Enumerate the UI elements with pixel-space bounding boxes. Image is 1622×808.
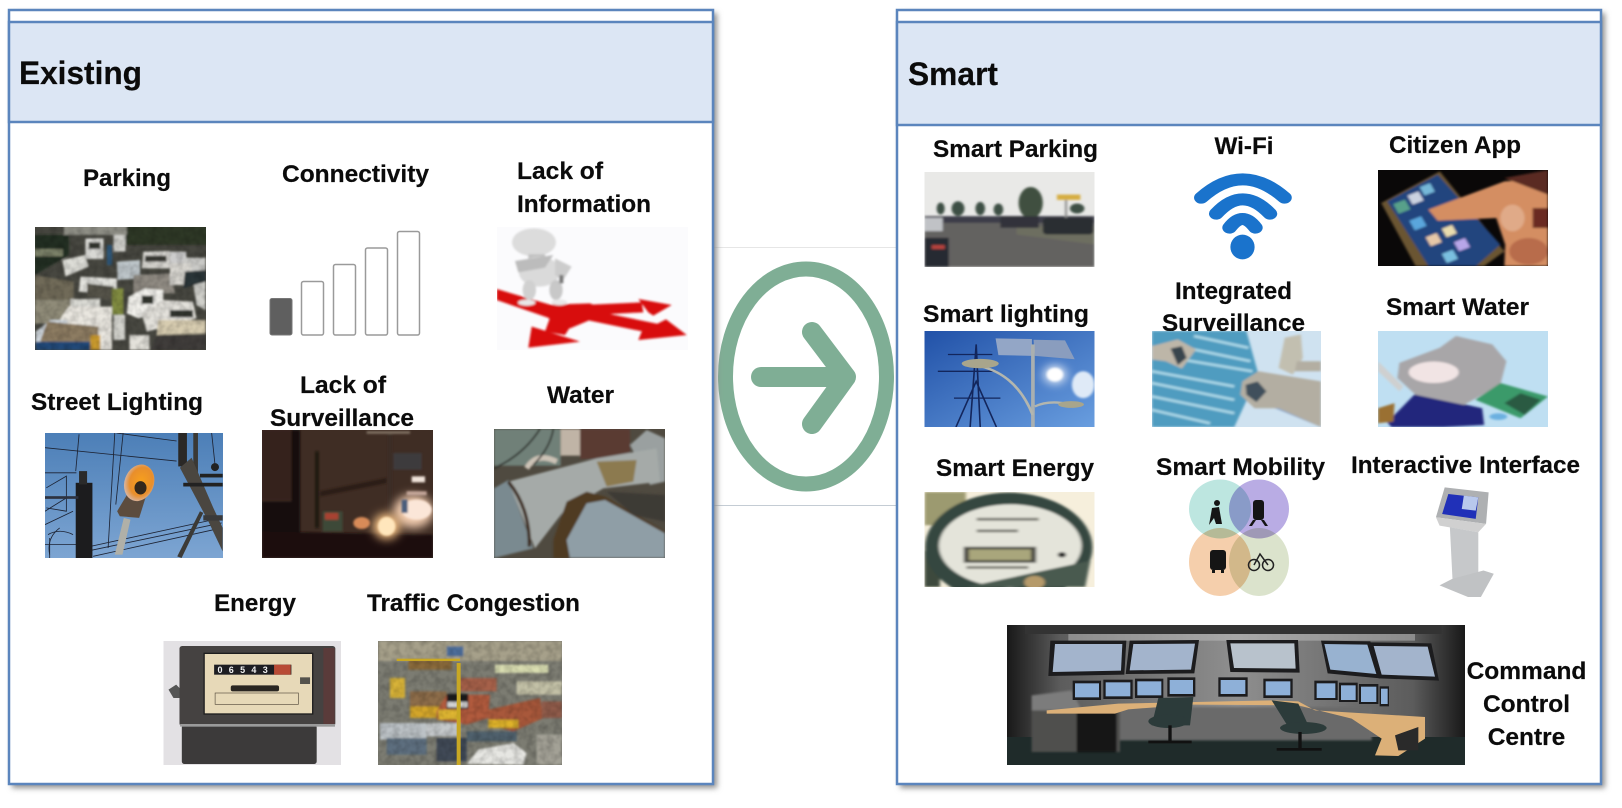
label: Command Control Centre [1467, 658, 1586, 751]
photo: street lamp and wires [45, 433, 223, 558]
panel: existing [9, 10, 717, 788]
connector line: top [713, 246, 896, 248]
photo: smart water meter [1378, 331, 1548, 427]
label: Integrated Surveillance: Integrated [1175, 278, 1292, 305]
icon: bus [1210, 550, 1226, 573]
heading: Smart: Smart [908, 56, 998, 92]
photo: analog energy meter [164, 641, 341, 765]
label: Smart Water: Smart Water [1386, 294, 1529, 321]
arrow: transition from existing to smart [726, 269, 886, 484]
photo: surveillance cameras on glass tower [1152, 331, 1321, 427]
label: Command Control Centre: Centre [1488, 724, 1565, 751]
icon: signal strength bars [270, 232, 420, 335]
label: Smart Energy: Smart Energy [936, 455, 1094, 482]
photo: smart parking lot [924, 172, 1094, 267]
icon: information kiosk [1436, 487, 1494, 597]
icon: bicycle [1248, 554, 1274, 570]
label: Street Lighting: Street Lighting [31, 389, 203, 416]
label: Lack of Information: Information [517, 191, 651, 218]
photo: digital smart meter [924, 492, 1094, 587]
label: Lack of Surveillance: Lack of [300, 372, 387, 399]
label: Smart Parking: Smart Parking [933, 136, 1098, 163]
label: Lack of Information: Lack of [517, 158, 604, 185]
label: Interactive Interface: Interactive Interface [1351, 452, 1580, 479]
label: Energy: Energy [214, 590, 296, 617]
label: Smart Mobility: Smart Mobility [1156, 454, 1325, 481]
label: Citizen App: Citizen App [1389, 132, 1521, 159]
photo: command control centre [1007, 625, 1465, 765]
header band: smart [897, 22, 1601, 125]
photo: dark street at night [262, 430, 433, 558]
label: Lack of Surveillance [270, 372, 414, 432]
photo: finger tapping smartphone [1378, 170, 1548, 266]
icon: wifi signal [1194, 173, 1292, 260]
label: Lack of Information [517, 158, 651, 218]
heading: Existing: Existing [19, 55, 142, 91]
icon: walker [1209, 500, 1222, 525]
photo: leaking rusty pipes [494, 429, 665, 558]
label: Command Control Centre: Command [1467, 658, 1586, 685]
label: Water: Water [547, 382, 614, 409]
label: Lack of Surveillance: Surveillance [270, 405, 414, 432]
label: Command Control Centre: Control [1483, 691, 1570, 718]
photo: traffic congestion [378, 641, 562, 765]
label: Smart lighting: Smart lighting [923, 301, 1089, 328]
photo: solar street light [924, 331, 1094, 427]
label: Wi-Fi: Wi-Fi [1214, 133, 1274, 160]
photo: thinking figure at red crossroads [497, 227, 688, 350]
label: Integrated Surveillance: Surveillance [1162, 310, 1305, 337]
label: Traffic Congestion: Traffic Congestion [367, 590, 580, 617]
panel: smart [897, 10, 1605, 788]
label: Connectivity: Connectivity [282, 161, 429, 188]
header band: existing [9, 22, 713, 122]
photo: analog energy meter: 06543 [217, 665, 274, 675]
label: Integrated Surveillance [1162, 278, 1305, 337]
label: Parking: Parking [83, 165, 171, 192]
icon: train [1249, 500, 1268, 526]
photo: congested parking [35, 227, 206, 350]
connector line: bottom [713, 504, 896, 506]
icon: smart mobility venn circles [1189, 480, 1289, 596]
